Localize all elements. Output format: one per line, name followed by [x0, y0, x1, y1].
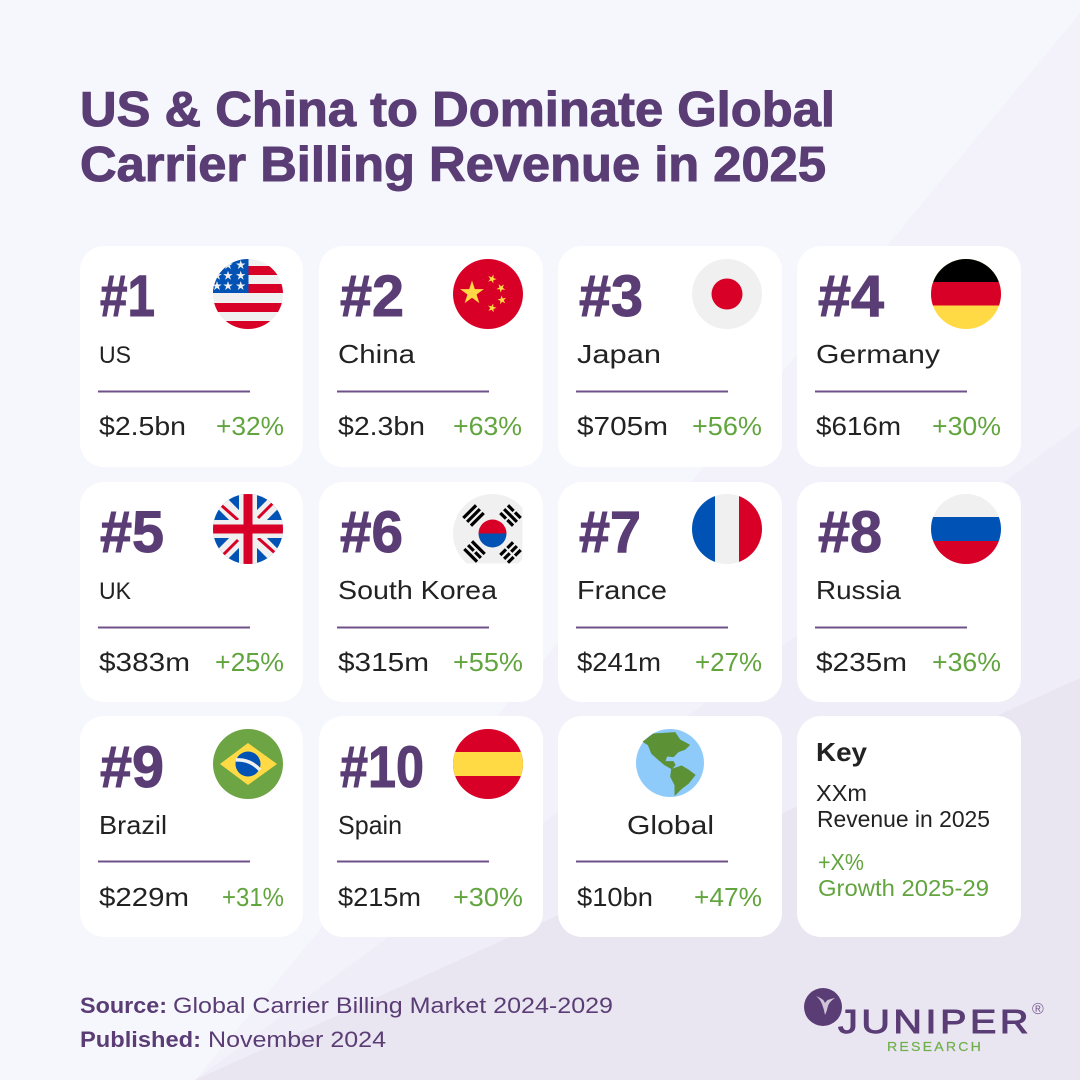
icon: Japan flag: [692, 259, 762, 329]
rank: #9: [100, 735, 164, 800]
revenue: $10bn: [577, 882, 653, 912]
growth: +55%: [453, 647, 523, 677]
country: Spain: [338, 810, 402, 840]
country: Global: [627, 810, 714, 840]
rank: #10: [340, 735, 424, 800]
icon: US flag: [212, 259, 283, 330]
country: UK: [99, 578, 131, 605]
revenue: $215m: [338, 882, 421, 912]
country: US: [99, 342, 131, 369]
panel: Russia: [797, 482, 1021, 702]
revenue: $383m: [99, 647, 190, 677]
country: Russia: [816, 575, 902, 605]
growth: +32%: [216, 411, 284, 441]
source note: [80, 993, 613, 1052]
panel: Japan: [558, 246, 782, 467]
country: South Korea: [338, 575, 498, 605]
country: China: [338, 339, 416, 369]
icon: Germany flag: [931, 259, 1001, 329]
icon: France flag: [692, 494, 762, 564]
key heading: Key: [816, 737, 868, 767]
key: growth: +X%: [818, 849, 864, 875]
revenue: $235m: [816, 647, 907, 677]
revenue: $705m: [577, 411, 668, 441]
revenue: $229m: [99, 882, 189, 912]
rank: #1: [100, 264, 155, 329]
growth: +63%: [453, 411, 522, 441]
rank: #4: [818, 264, 884, 329]
revenue: $2.3bn: [338, 411, 425, 441]
panel: UK: [80, 482, 303, 702]
rank: #7: [579, 500, 641, 565]
key: revenue: Revenue in 2025: [817, 806, 990, 832]
icon: globe: [636, 729, 704, 797]
growth: +36%: [932, 647, 1001, 677]
country: Germany: [816, 339, 940, 369]
title: Carrier Billing Revenue in 2025: [80, 138, 826, 192]
rank: #5: [100, 500, 164, 565]
country: Brazil: [99, 810, 167, 840]
logo: Juniper Research: JUNIPER: [838, 1003, 1032, 1040]
panel: US: [80, 246, 303, 467]
country: Japan: [577, 339, 661, 369]
key: revenue: [816, 780, 990, 832]
icon: Brazil flag: [213, 729, 283, 799]
logo: Juniper Research: ®: [1032, 1001, 1044, 1018]
growth: +56%: [692, 411, 762, 441]
title: US & China to Dominate Global: [80, 83, 835, 137]
panel: China: [319, 246, 543, 467]
rank: #8: [818, 500, 882, 565]
icon: UK flag: [213, 494, 283, 564]
panel: France: [558, 482, 782, 702]
growth: +47%: [694, 882, 762, 912]
revenue: $241m: [577, 647, 661, 677]
panel: Brazil: [80, 716, 303, 937]
icon: China flag: [453, 259, 523, 329]
revenue: $2.5bn: [99, 411, 186, 441]
panel: South Korea: [319, 482, 543, 702]
rank: #3: [579, 264, 643, 329]
icon: Spain flag: [453, 729, 523, 799]
growth: +31%: [222, 882, 284, 912]
panel: Germany: [797, 246, 1021, 467]
source note: Source:: [80, 993, 167, 1018]
growth: +30%: [453, 882, 523, 912]
revenue: $315m: [338, 647, 429, 677]
panel: Global: [558, 716, 782, 937]
rank: #2: [340, 264, 404, 329]
logo: Juniper Research: [804, 988, 1044, 1054]
panel: key: [797, 716, 1021, 937]
source note: Global Carrier Billing Market 2024-2029: [173, 993, 613, 1018]
key: growth: [818, 849, 989, 901]
source note: Published:: [80, 1027, 201, 1052]
source note: November 2024: [208, 1027, 386, 1052]
key: growth: Growth 2025-29: [818, 875, 989, 901]
country: France: [577, 575, 667, 605]
growth: +27%: [695, 647, 762, 677]
icon: Russia flag: [931, 494, 1001, 564]
key: revenue: XXm: [816, 780, 867, 806]
growth: +30%: [932, 411, 1001, 441]
panel: Spain: [319, 716, 543, 937]
revenue: $616m: [816, 411, 901, 441]
title: [80, 83, 835, 192]
growth: +25%: [215, 647, 284, 677]
rank: #6: [340, 500, 403, 565]
logo: Juniper Research: RESEARCH: [887, 1039, 983, 1054]
icon: South Korea flag: [453, 494, 522, 564]
